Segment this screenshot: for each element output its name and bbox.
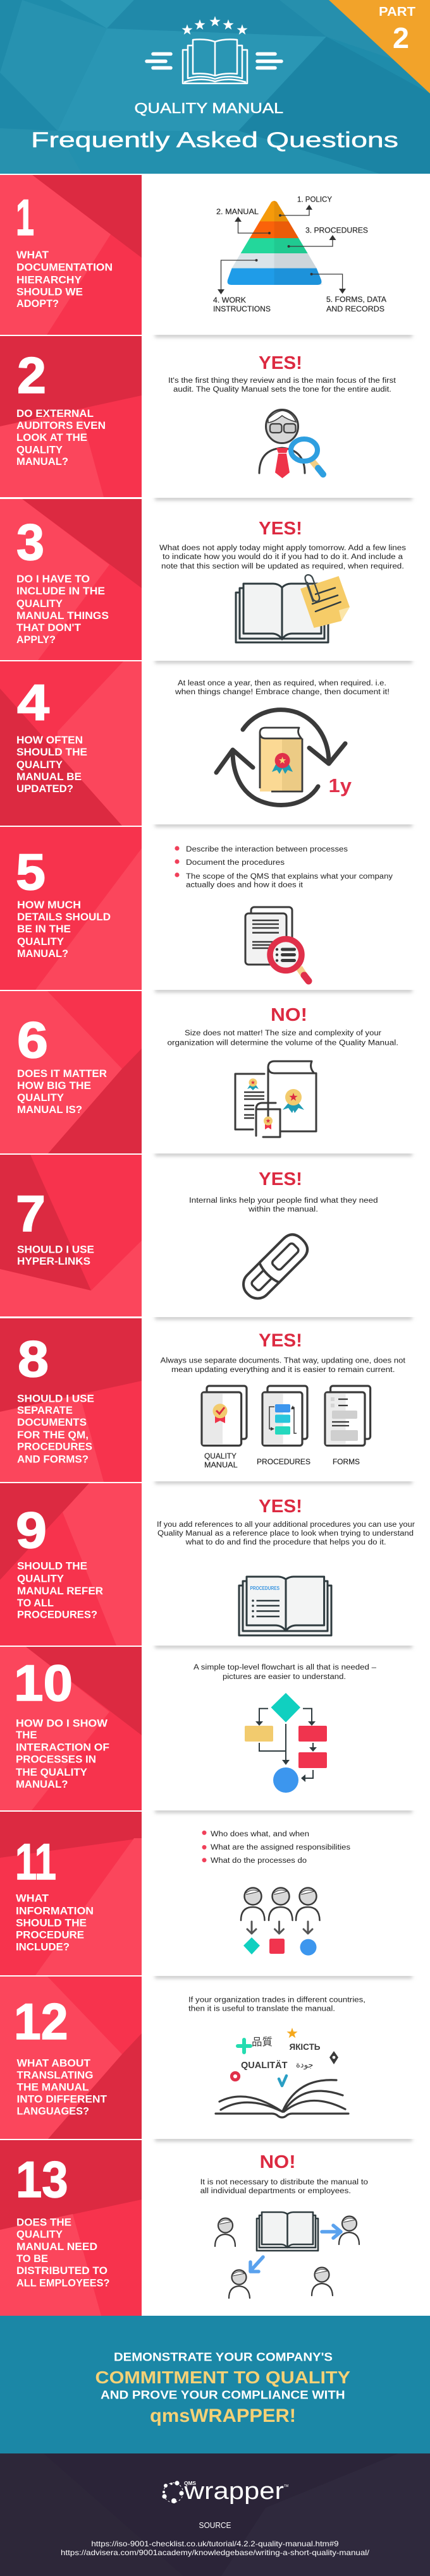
panel: question 11 [0,1812,142,1975]
question text: BE IN THE [17,923,71,935]
answer 13 [200,2152,368,2298]
chart: documentation hierarchy pyramid: INSTRUCTIONS [213,306,271,313]
answer text: Always use separate documents. That way, updating one, does not [161,1357,406,1365]
question text: WHAT [16,249,49,261]
icon: procedures document [257,1386,310,1466]
question text: SHOULD I USE [17,1243,94,1256]
chart: documentation hierarchy pyramid [213,196,386,313]
no heading: NO! [271,1005,307,1025]
answer text: It's the first thing they review and is the main focus of the first [168,377,396,385]
question text: INCLUDE IN THE [16,585,105,597]
answer text: It is not necessary to distribute the manual to [200,2179,368,2186]
answer text: what to do and find the procedure that helps you do it. [185,1539,386,1546]
icon: documents of different sizes [235,1061,316,1137]
answer text: pictures are easier to understand. [223,1673,346,1681]
icon: yearly update cycle around a book [216,710,352,805]
panel: question 5 [0,827,142,990]
number 2: 2 [17,347,46,404]
bullet list: Document the procedures [186,859,285,867]
question text: AUDITORS EVEN [16,419,106,431]
answer text [189,1197,378,1213]
question text: DOCUMENTS [17,1416,87,1428]
source list: SOURCE [199,2520,231,2530]
answer 6 [167,1005,398,1137]
question text: UPDATED? [16,783,73,795]
question text: PROCESSES IN [16,1754,96,1765]
question text: ALL EMPLOYEES? [16,2277,110,2289]
header [0,0,430,174]
answer 10 [194,1664,377,1793]
icon: translations rising from book: ЯКІСТЬ [290,2042,320,2052]
question text [16,573,109,646]
label: MANUAL [204,1462,238,1469]
question text: TRANSLATING [16,2069,94,2081]
number 4: 4 [17,675,49,731]
source list [61,2520,370,2557]
question text: MANUAL THINGS [16,610,109,622]
bullet list: Describe the interaction between processes [186,846,348,853]
answer text [175,680,390,696]
answer 5 [175,846,393,981]
icon: documents under magnifier [245,907,309,981]
question text [17,1560,103,1621]
question text: QUALITY [17,1092,64,1104]
icon: open book with procedures list [239,1577,331,1635]
answer text [200,2179,368,2195]
answer 4 [175,680,390,805]
icon: translations rising from book: QUALITÄT [241,2060,287,2071]
question text: SEPARATE [17,1404,73,1416]
yes heading: YES! [259,519,302,539]
answer text: then it is useful to translate the manual. [188,2005,335,2013]
no heading: NO! [260,2152,296,2172]
question text: TO BE [16,2253,48,2265]
question text: DO I HAVE TO [16,573,90,585]
question text: TO ALL [17,1597,54,1609]
question text: QUALITY [17,936,64,948]
bullet list: What are the assigned responsibilities [211,1844,350,1851]
icon: quality manual document [202,1386,247,1469]
yes heading: YES! [259,1331,302,1351]
call to action banner: DEMONSTRATE YOUR COMPANY'S [114,2350,333,2364]
icon: yearly update cycle around a book: 1y [329,774,352,797]
part badge: 2 [393,21,409,54]
part badge [329,0,430,93]
part badge: PART [379,5,415,19]
question text [17,1392,94,1466]
question text: PROCEDURES [17,1440,92,1453]
icon: open book with procedures list: PROCEDURES [250,1586,280,1591]
question text: INTO DIFFERENT [16,2093,108,2105]
panel: question 13 [0,2140,142,2316]
answer text: to indicate how you would do it if you had to do it. And include a [163,553,403,561]
number 12: 12 [14,1994,68,2050]
panel: question 8 [0,1318,142,1482]
title: Frequently Asked Questions [31,128,398,152]
yes heading: YES! [259,353,302,373]
chart: documentation hierarchy pyramid: AND RECORDS [326,306,384,313]
question text: SHOULD THE [16,1917,87,1929]
icon: book with employees and arrows [215,2212,359,2298]
answer text [159,545,406,570]
chart: documentation hierarchy pyramid: 1. POLICY [297,196,332,204]
answer text: If your organization trades in different countries, [188,1996,366,2004]
question text: APPLY? [16,634,56,646]
question text: AND FORMS? [17,1453,89,1466]
question text: LANGUAGES? [16,2105,89,2117]
answer text: At least once a year, then as required, when required. i.e. [178,680,386,687]
question text: HOW DO I SHOW [16,1717,108,1729]
answer 12 [188,1996,366,2117]
question text: WHAT [16,1893,49,1905]
number 1: 1 [16,190,34,246]
answer text: Size does not matter! The size and complexity of your [185,1030,381,1037]
icon: auditor with magnifier [259,409,323,478]
question text: QUALITY [16,444,63,456]
title [31,100,398,152]
answer text [168,377,396,394]
question text: THE QUALITY [16,1766,88,1778]
logo: TM [284,2484,288,2488]
panel: question 2 [0,336,142,497]
question text: MANUAL NEED [16,2241,97,2253]
question text: THE [16,1729,37,1741]
yes heading: YES! [259,1496,302,1517]
answer text: A simple top-level flowchart is all that is needed – [194,1664,377,1671]
question text: LOOK AT THE [16,431,87,443]
icon: book with sticky note [236,575,350,642]
question text: DOES THE [16,2216,71,2228]
question text [16,1893,94,1953]
question text: MANUAL REFER [17,1585,103,1597]
answer text: What does not apply today might apply tomorrow. Add a few lines [159,545,406,552]
question text: HIERARCHY [16,274,82,286]
question text: MANUAL? [16,1778,68,1790]
number 3: 3 [16,514,44,571]
call to action banner: qmsWRAPPER! [150,2405,296,2426]
question text [16,2057,108,2117]
title: QUALITY MANUAL [134,100,283,116]
question text [16,2216,110,2289]
question text [17,1243,94,1267]
question text: SHOULD THE [17,1560,87,1572]
icon: forms document [325,1386,371,1466]
logo [162,2478,288,2505]
panel: question 9 [0,1483,142,1646]
panel: question 1 [0,175,142,335]
question text: ADOPT? [16,298,59,310]
question text: MANUAL BE [16,771,82,783]
question text: THAT DON'T [16,622,82,634]
answer text [161,1357,406,1374]
panel: question 6 [0,991,142,1153]
number 10: 10 [14,1655,73,1712]
bullet list [175,846,393,889]
answer text: mean updating everything and it is easier to remain current. [171,1366,395,1374]
question text: QUALITY [16,598,63,610]
chart: documentation hierarchy pyramid: 2. MANUAL [216,208,259,216]
question text: FOR THE QM, [17,1429,89,1441]
question text: QUALITY [17,1573,64,1584]
source list: https://advisera.com/9001academy/knowledgebase/writing-a-short-quality-manual/ [61,2548,370,2557]
question text [16,1717,109,1790]
label: FORMS [333,1459,360,1466]
bullet list: The scope of the QMS that explains what your company [186,873,393,881]
call to action banner [0,2316,430,2453]
question text: SHOULD THE [16,746,87,758]
question text: DISTRIBUTED TO [16,2265,108,2277]
panel: question 10 [0,1647,142,1810]
number 11: 11 [15,1834,56,1891]
call to action banner: COMMITMENT TO QUALITY [95,2368,350,2387]
question text: MANUAL? [16,455,68,467]
question text: QUALITY [16,759,63,771]
number 5: 5 [16,844,46,901]
answer text: Internal links help your people find what they need [189,1197,378,1205]
source list: https://iso-9001-checklist.co.uk/tutorial/4.2.2-quality-manual.htm#9 [91,2539,339,2548]
logo: QMS [184,2481,197,2486]
answer text: all individual departments or employees. [200,2188,351,2195]
chart: process flowchart [245,1693,327,1793]
answer text [167,1030,398,1047]
panel: question 7 [0,1155,142,1316]
label: QUALITY [204,1453,236,1460]
panel: question 12 [0,1977,142,2139]
number 7: 7 [16,1186,46,1243]
answer 9 [157,1496,415,1635]
icon: chain link [238,1230,312,1304]
question text: HOW MUCH [17,899,81,911]
icon: translations rising from book [216,2028,348,2117]
number 6: 6 [17,1012,48,1069]
question text: MANUAL? [17,948,68,960]
answer text: audit. The Quality Manual sets the tone for the entire audit. [173,386,391,394]
label [204,1453,238,1469]
question text [16,407,106,467]
question text: INTERACTION OF [16,1742,109,1754]
chart: documentation hierarchy pyramid: 3. PROCEDURES [305,227,368,235]
question text [17,899,111,960]
label: PROCEDURES [257,1459,310,1466]
question text: QUALITY [16,2229,63,2241]
bullet list: Who does what, and when [211,1831,309,1838]
question text: DOCUMENTATION [16,261,113,273]
question text [16,249,113,310]
call to action banner: AND PROVE YOUR COMPLIANCE WITH [101,2388,345,2402]
answer 7 [189,1169,378,1304]
answer 2 [168,353,396,478]
number 9: 9 [16,1502,47,1559]
question text: PROCEDURES? [17,1609,97,1621]
bullet list: actually does and how it does it [186,882,304,889]
answer text: when things change! Embrace change, then document it! [175,689,390,696]
bullet list: What do the processes do [211,1857,307,1865]
question text: DETAILS SHOULD [17,911,111,923]
question text: MANUAL IS? [17,1104,82,1116]
question text: DOES IT MATTER [17,1068,107,1080]
answer text: If you add references to all your additional procedures you can use your [157,1521,415,1529]
bullet list [202,1831,350,1865]
answer 8 [161,1331,406,1469]
answer text [194,1664,377,1681]
question text: SHOULD I USE [17,1392,94,1405]
chart: documentation hierarchy pyramid: 5. FORMS, DATA [326,296,386,304]
question text: WHAT ABOUT [16,2057,91,2069]
panel: question 3 [0,499,142,660]
icon: rated open book [147,16,281,83]
panel: question 4 [0,661,142,826]
question text: SHOULD WE [16,286,83,298]
yes heading: YES! [259,1169,302,1189]
chart: documentation hierarchy pyramid: 4. WORK [213,297,246,304]
number 13: 13 [16,2152,68,2208]
icon: three people mapped to shapes [241,1887,320,1956]
question text: PROCEDURE [16,1929,84,1941]
question text [16,734,87,795]
question text: HOW BIG THE [17,1080,91,1092]
answer 11 [202,1831,350,1956]
icon: translations rising from book: 品質 [252,2036,273,2048]
answer text: Quality Manual as a reference place to look when trying to understand [157,1530,414,1538]
number 8: 8 [18,1331,49,1388]
answer text: organization will determine the volume of the Quality Manual. [167,1040,398,1047]
question text: INCLUDE? [16,1941,70,1953]
question text [17,1068,107,1116]
footer [0,2453,430,2576]
question text: HOW OFTEN [16,734,83,746]
answer text: note that this section will be updated as required, when required. [161,563,404,570]
question text: DO EXTERNAL [16,407,94,419]
question text: HYPER-LINKS [17,1255,90,1267]
logo: wrapper [183,2478,284,2505]
question text: INFORMATION [16,1905,94,1917]
icon: translations rising from book: جودة [296,2061,313,2070]
answer 3 [159,519,406,642]
answer text [157,1521,415,1546]
question text: THE MANUAL [16,2081,89,2093]
answer text [188,1996,366,2013]
answer text: within the manual. [248,1206,318,1213]
